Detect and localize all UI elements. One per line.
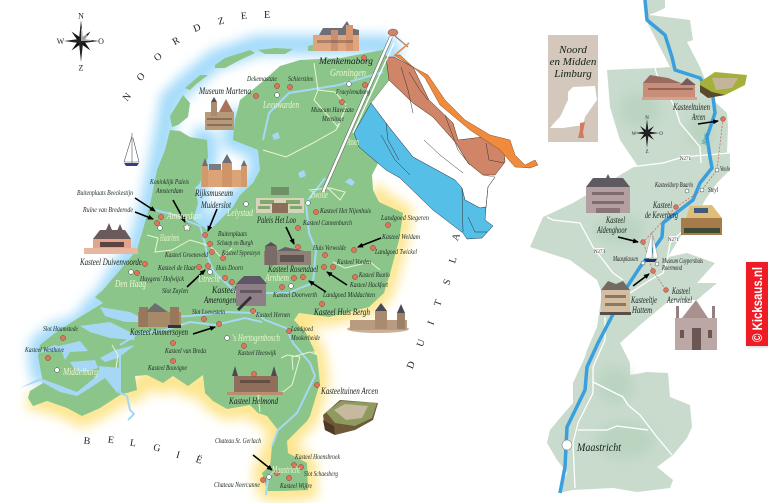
flag: white stripe	[371, 80, 495, 208]
compass rose	[57, 12, 104, 72]
country label: Duitsland: I	[426, 320, 437, 327]
country label: België: G	[152, 442, 162, 455]
labels: Limburg: Maas	[700, 132, 710, 146]
place labels: Kasteel de Haar	[157, 263, 196, 272]
country label: België: E	[107, 435, 115, 446]
inset heading: Limburg	[553, 68, 592, 80]
inset heading	[550, 44, 597, 80]
city labels: Zwolle	[310, 190, 328, 201]
place labels: Kasteel Hernen	[255, 310, 290, 319]
place labels: Huis Verwolde	[312, 243, 346, 252]
labels: Limburg: Kasteel	[671, 287, 690, 297]
rivers	[150, 72, 383, 495]
flag: orange pennant	[394, 55, 538, 168]
castle: Paleis Het Loo	[256, 187, 304, 213]
place labels: Kasteel Weldam	[381, 232, 420, 241]
place labels: Schierstins	[288, 74, 313, 83]
castle: Kasteel Arcen	[642, 75, 697, 100]
labels: Limburg: Maastricht	[576, 440, 622, 454]
place labels: Kasteel Huis Bergh	[313, 308, 370, 318]
markers: Limburg	[562, 117, 725, 450]
panel: inset locator Noord en Midden Limburg	[548, 35, 598, 142]
road shields: N273	[594, 250, 606, 255]
city labels: Haarlem	[159, 233, 179, 244]
city labels: Maastricht	[271, 465, 300, 476]
labels: Limburg: de Keverberg	[645, 211, 678, 221]
place labels: Museum Martena	[198, 87, 251, 97]
province borders	[112, 63, 380, 412]
place labels: Kasteel Sypesteyn	[221, 248, 260, 257]
place labels: Huygens' Hofwijck	[139, 274, 185, 283]
city labels: Lelystad	[226, 208, 254, 219]
sea label: Noordzee: N	[121, 91, 134, 104]
flag pole inner	[323, 29, 409, 192]
place labels: Slot Loevestein	[192, 307, 225, 316]
labels: Limburg: Roermond	[661, 264, 682, 272]
land: Wadden islands	[170, 44, 316, 127]
flag: blue stripe	[354, 103, 493, 239]
place labels: Kasteel Wijlre	[279, 481, 312, 490]
place labels: Rijksmuseum	[194, 189, 233, 199]
compass rose: Limburg	[632, 116, 663, 155]
blue coast glow	[38, 45, 395, 383]
labels: Limburg: Kasteeltuinen	[672, 103, 710, 113]
place labels: Kasteel Hoensbroek	[294, 452, 340, 461]
roads	[547, 10, 730, 488]
country label: Duitsland: T	[432, 298, 445, 308]
country label: België: B	[83, 436, 91, 447]
labels: Limburg: Aldenghoor	[596, 226, 627, 236]
place labels: Kasteel Helmond	[228, 397, 278, 407]
garden: Kasteeltuinen Arcen	[323, 400, 378, 435]
place labels: Kasteel Het Nijenhuis	[319, 206, 371, 215]
compass rose: Limburg: N	[645, 116, 649, 121]
city labels: Arnhem	[264, 273, 289, 284]
labels: Limburg: Kasteel	[605, 216, 625, 226]
panel: map of the Netherlands	[20, 44, 403, 495]
city labels: Middelburg	[62, 367, 98, 378]
castle: Amerongen	[236, 276, 267, 310]
castle: Ammersoyen	[138, 303, 181, 328]
sea label: Noordzee: Z	[217, 15, 226, 28]
country label: België	[83, 435, 204, 467]
place labels	[24, 57, 429, 490]
country label: België: I	[175, 450, 181, 461]
credit badge: Kicksaus	[746, 262, 768, 347]
road shields	[594, 155, 692, 255]
place labels: Kasteel van Breda	[164, 346, 206, 355]
compass rose: N	[78, 12, 84, 20]
place labels: Kasteel Heeswijk	[237, 348, 276, 357]
inset heading: Noord	[558, 44, 587, 56]
road shields: N271	[668, 238, 680, 243]
map markers	[45, 55, 391, 483]
inset: Limburg highlighted	[578, 122, 585, 138]
labels: Limburg: Kasteel	[652, 201, 672, 211]
place labels: Kasteel Duivenvoorde	[79, 258, 142, 268]
place labels: Kasteel Ammersoyen	[129, 328, 188, 338]
labels: Limburg: Hattem	[631, 306, 652, 316]
inset: silhouette of the Netherlands	[550, 86, 597, 128]
place labels: Amsterdam	[155, 186, 183, 195]
place labels: Huis Doorn	[215, 263, 243, 272]
place labels: Slot Schaesberg	[304, 469, 338, 478]
compass rose: Limburg: O	[659, 132, 663, 137]
compass rose: Z	[79, 64, 84, 72]
compass rose: O	[98, 37, 104, 46]
castle: Aldenghoor	[586, 174, 630, 213]
castle: Kasteeltje Hattem	[600, 281, 631, 315]
place labels: Mensinge	[321, 114, 344, 123]
sea label: Noordzee: O	[135, 71, 148, 84]
castle: Museum Martena	[205, 97, 234, 130]
castle: Helmond	[227, 366, 283, 395]
land: Limburg	[530, 0, 730, 493]
city labels: Amsterdam	[166, 211, 202, 222]
labels: Limburg: Aerwinkel	[666, 296, 692, 306]
garden: Kasteeltuinen Arcen	[700, 72, 747, 98]
country label: België: L	[129, 438, 137, 449]
labels: Limburg: Maasplassen	[612, 255, 638, 263]
land: mainland	[28, 50, 403, 491]
place labels: Kasteel Westhove	[24, 345, 64, 354]
place labels: Amerongen	[203, 296, 236, 306]
place labels: Kasteel Hackfort	[349, 280, 389, 289]
place labels: Landgoed Twickel	[374, 247, 417, 256]
sea label: Noordzee: R	[171, 35, 182, 48]
compass rose: Limburg: Z	[645, 150, 649, 155]
place labels: Landgoed Stegeren	[380, 213, 429, 222]
labels: Limburg: Kasteeltje	[630, 296, 657, 306]
sea label: Noordzee: E	[264, 10, 270, 21]
arrows	[135, 198, 381, 470]
labels: Limburg: Venlo	[720, 165, 730, 173]
country label: Duitsland: S	[441, 278, 454, 286]
castle: Menkemaborg	[308, 21, 359, 51]
place labels: Kasteel Cannenburch	[302, 218, 352, 227]
place labels: Kasteel Bouvigne	[147, 363, 187, 372]
castle: Huis Bergh	[347, 303, 409, 333]
place labels: Slot Zuylen	[162, 286, 188, 295]
country label: Duitsland: U	[415, 337, 428, 349]
castle: Rosendael	[264, 242, 311, 265]
place labels: Kasteel Groeneveld	[164, 250, 208, 259]
place labels: Schaep en Burgh	[217, 238, 253, 247]
city labels: Utrecht	[198, 274, 220, 285]
place labels: Mookerheide	[290, 333, 320, 342]
icon: white sailboat	[644, 232, 658, 262]
place labels: Dekemastate	[246, 74, 278, 83]
castle: Aerwinkel	[675, 300, 717, 350]
flag	[323, 37, 538, 239]
place labels: Koninklijk Paleis	[149, 177, 189, 186]
country label: Duitsland	[405, 231, 463, 371]
credit badge: Kicksaus: © Kicksaus.nl	[749, 267, 765, 342]
flag: red stripe	[386, 57, 505, 175]
country label: Duitsland: D	[405, 360, 418, 371]
sea label: Noordzee	[121, 10, 270, 104]
labels: Limburg: Kasteeldorp Baarlo	[654, 181, 693, 189]
land mottling	[595, 92, 712, 458]
route: dashed red line	[643, 119, 723, 290]
castle: Muiderslot	[201, 154, 247, 187]
panel: map of North and Central Limburg	[530, 0, 747, 493]
place labels: Chateau Neercanne	[214, 480, 261, 489]
place labels: Fraeylemaborg	[335, 87, 370, 96]
yellow border glow	[28, 188, 403, 493]
labels: Limburg: Arcen	[691, 113, 705, 123]
place labels: Paleis Het Loo	[256, 216, 296, 226]
place labels: Buitenplaats Beeckestijn	[77, 188, 133, 197]
sea label: Noordzee: E	[240, 11, 248, 22]
place labels: Museum Havezate	[310, 105, 355, 114]
inset heading: en Midden	[550, 56, 597, 68]
flag: pole	[323, 37, 391, 192]
place labels: Chateau St. Gerlach	[215, 436, 261, 445]
place labels: Kasteel Doorwerth	[272, 290, 317, 299]
arrows: Limburg	[618, 121, 718, 286]
flag: fold lines	[381, 67, 504, 232]
country label: Duitsland: A	[450, 231, 463, 242]
icon: sailboat	[124, 133, 139, 166]
place labels: Landgoed Middachten	[322, 290, 375, 299]
sea label: Noordzee: O	[152, 51, 165, 64]
city labels	[62, 68, 366, 476]
labels: Limburg: Museum Cuypershuis	[661, 257, 703, 265]
castle: Duivenvoorde	[84, 223, 138, 254]
river: Maas	[560, 0, 715, 493]
water: Zeeland delta	[20, 307, 262, 420]
place labels: Kasteel Ruurlo	[358, 270, 390, 279]
place labels: Landgoed	[290, 324, 313, 333]
city labels: Groningen	[330, 68, 366, 79]
place labels: Kasteel Vorden	[336, 257, 371, 266]
country label: België: Ë	[194, 453, 204, 467]
place labels: Kasteel Rosendael	[267, 265, 318, 275]
labels: Limburg	[576, 103, 730, 454]
place labels: Ruïne van Brederode	[82, 205, 134, 214]
labels: Limburg: Steyl	[708, 186, 718, 194]
place labels: Kasteeltuinen Arcen	[320, 387, 378, 397]
country label: Duitsland: L	[447, 256, 460, 265]
place labels: Menkemaborg	[318, 57, 373, 67]
city labels: 's Hertogenbosch	[232, 333, 280, 344]
road shields: N271	[680, 157, 692, 162]
castle: De Keverberg	[681, 205, 722, 235]
city labels: Den Haag	[114, 279, 146, 290]
city labels: Leeuwarden	[262, 100, 299, 111]
compass rose: Limburg: W	[632, 132, 637, 137]
place labels: Muiderslot	[200, 201, 231, 211]
place labels: Kasteel	[211, 286, 236, 296]
place labels: Slot Haamstede	[43, 324, 78, 333]
city labels: Assen	[346, 137, 359, 148]
sea label: Noordzee: D	[192, 22, 203, 35]
place labels: Buitenplaats	[218, 229, 247, 238]
compass rose: W	[57, 37, 65, 46]
